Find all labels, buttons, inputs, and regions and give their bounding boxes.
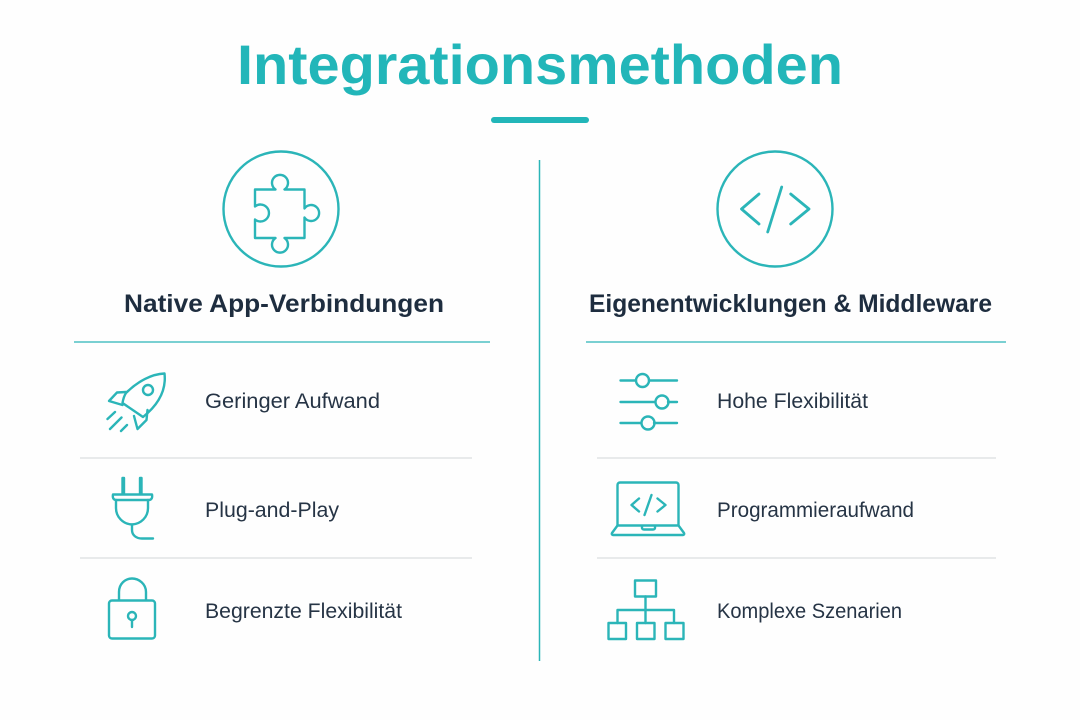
- row: Begrenzte Flexibilitaet: [109, 578, 402, 638]
- row: Plug-and-Play: [113, 478, 340, 538]
- label: Begrenzte Flexibilität: [205, 600, 402, 623]
- icon: hierarchy diagram: [608, 580, 684, 639]
- row divider: [80, 557, 472, 559]
- icon: laptop with code: [612, 482, 684, 535]
- label: Geringer Aufwand: [205, 390, 380, 413]
- heading rule: [586, 341, 1006, 343]
- label: Hohe Flexibilität: [717, 390, 868, 413]
- row: Geringer Aufwand: [108, 374, 380, 431]
- title: Integrationsmethoden: [237, 33, 843, 96]
- icon: plug: [113, 478, 153, 538]
- icon: rocket: [108, 374, 165, 431]
- row divider: [597, 557, 996, 559]
- icon: code in circle: [718, 152, 832, 266]
- label: Komplexe Szenarien: [717, 600, 902, 623]
- row divider: [80, 457, 472, 459]
- panel: native app connections: [74, 152, 490, 638]
- heading: Eigenentwicklungen und Middleware: Eigenentwicklungen & Middleware: [589, 290, 992, 318]
- icon: padlock: [109, 578, 155, 638]
- heading: Native App-Verbindungen: Native App-Verbindungen: [124, 290, 444, 318]
- icon: sliders: [620, 374, 677, 430]
- panel: custom development and middleware: [586, 152, 1006, 639]
- row: Programmieraufwand: [612, 482, 914, 535]
- label: Plug-and-Play: [205, 499, 340, 522]
- row: Hohe Flexibilitaet: [620, 374, 868, 430]
- center divider: [538, 160, 540, 661]
- label: Programmieraufwand: [717, 499, 914, 522]
- row: Komplexe Szenarien: [608, 580, 902, 639]
- icon: puzzle piece in circle: [224, 152, 338, 266]
- title underline: [491, 117, 589, 123]
- row divider: [597, 457, 996, 459]
- heading rule: [74, 341, 490, 343]
